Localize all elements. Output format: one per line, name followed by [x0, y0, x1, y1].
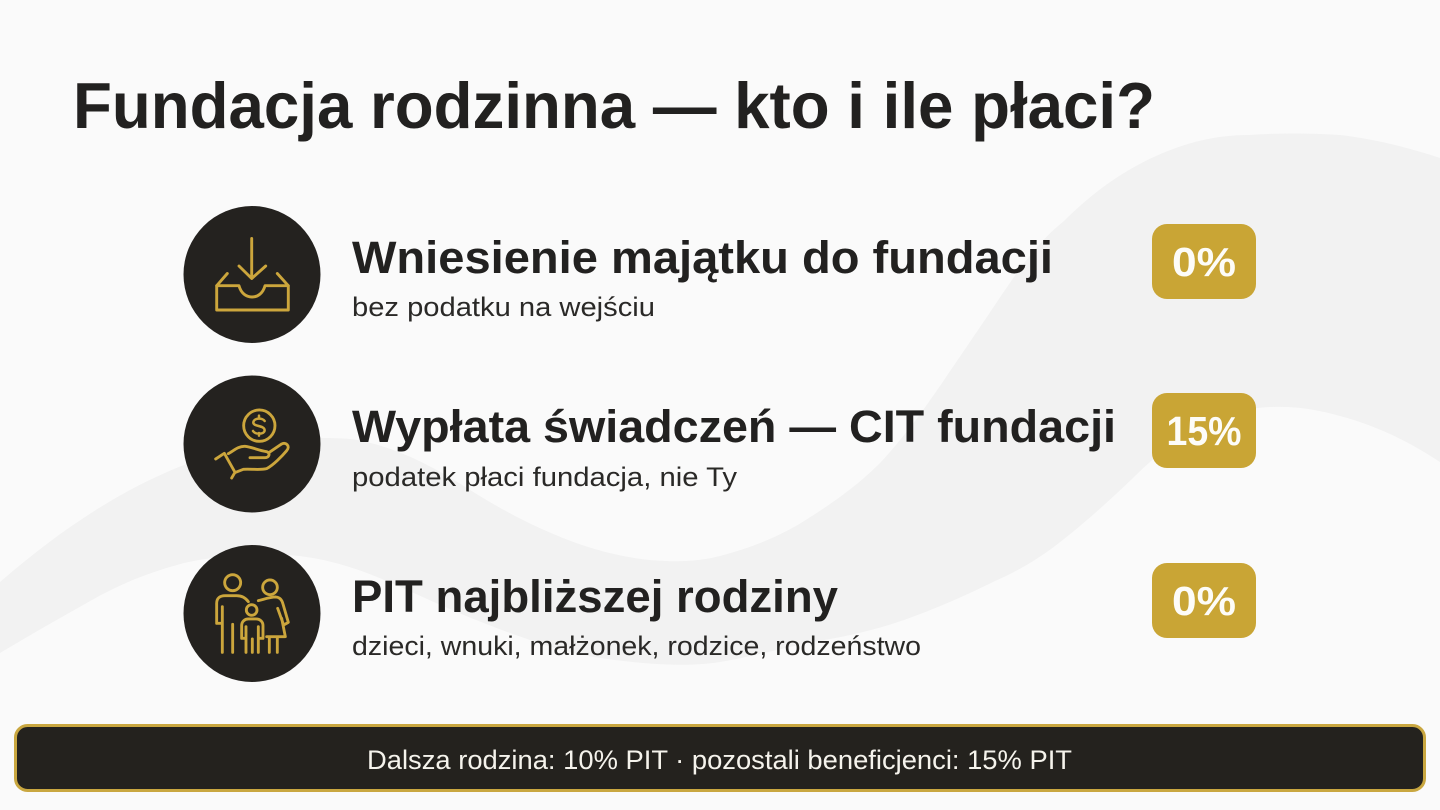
- heading: Wniesienie majątku do fundacji: [352, 232, 1053, 283]
- row: wniesienie majątku: [184, 206, 1256, 343]
- badge: 0%: [1152, 563, 1256, 638]
- badge: 15%: 15%: [1166, 408, 1242, 454]
- icon: hand with coin: [184, 376, 320, 512]
- description: dzieci, wnuki, małżonek, rodzice, rodzeństwo: [352, 631, 921, 661]
- description: podatek płaci fundacja, nie Ty: [352, 462, 738, 492]
- badge: 0%: 0%: [1172, 578, 1236, 624]
- badge: 0%: 0%: [1172, 239, 1236, 285]
- row: PIT najbliższej rodziny: [184, 545, 1256, 682]
- icon: family: [184, 545, 320, 682]
- row: wypłata świadczeń: [184, 376, 1256, 512]
- footer callout: Dalsza rodzina: 10% PIT · pozostali beneficjenci: 15% PIT: [367, 745, 1072, 775]
- title: Fundacja rodzinna — kto i ile płaci?: [73, 69, 1155, 142]
- footer callout: [16, 726, 1424, 790]
- heading: PIT najbliższej rodziny: [352, 571, 838, 622]
- heading: Wypłata świadczeń — CIT fundacji: [352, 401, 1116, 452]
- icon: download to tray: [184, 206, 320, 343]
- badge: 0%: [1152, 224, 1256, 299]
- badge: 15%: [1152, 393, 1256, 468]
- description: bez podatku na wejściu: [352, 292, 655, 322]
